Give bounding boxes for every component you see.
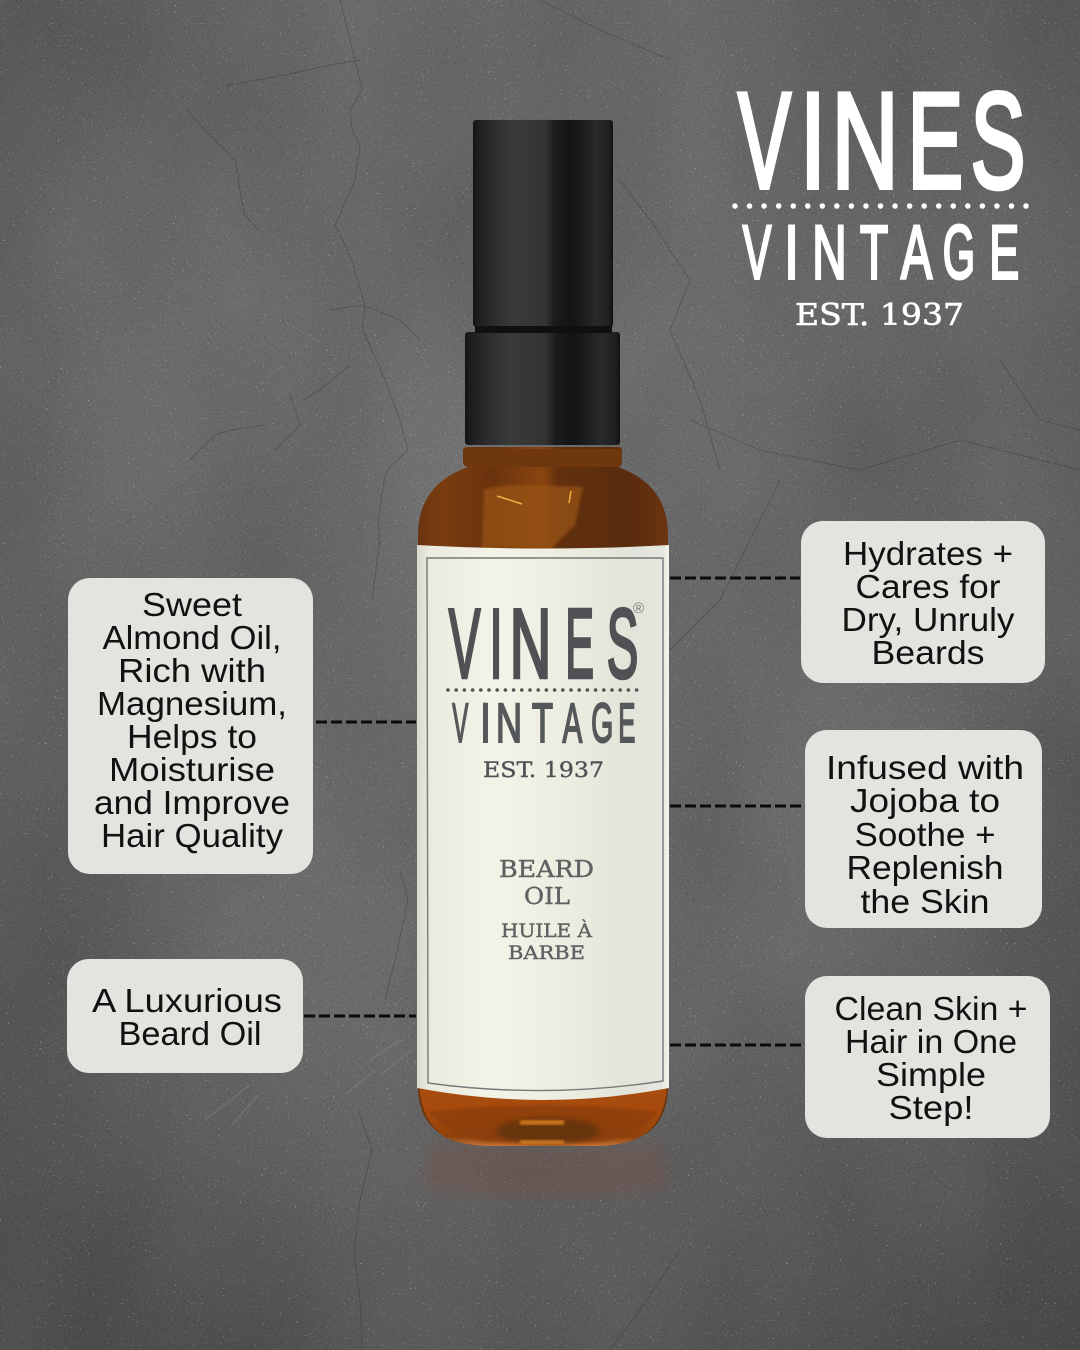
logo wordmark: VINES: S (971, 64, 1025, 217)
callout: hydrates and cares: Cares for (856, 568, 1000, 605)
label wordmark: VINTAGE: V (452, 693, 469, 755)
logo wordmark: VINTAGE: N (812, 211, 847, 295)
callout: sweet almond oil: Sweet (142, 586, 242, 623)
logo wordmark: VINES: I (800, 65, 826, 217)
label wordmark: VINES: S (607, 590, 638, 699)
callout: hydrates and cares: Beards (872, 634, 984, 671)
bottle base oil (419, 1086, 667, 1146)
callout: infused with jojoba: Soothe + (854, 816, 996, 853)
callout: sweet almond oil: Helps to (127, 718, 257, 755)
logo wordmark: VINES: V (738, 64, 791, 217)
glass highlight (482, 485, 583, 548)
logo wordmark: VINTAGE: A (901, 211, 932, 295)
bottle reflection (424, 1142, 668, 1196)
logo: Vines Vintage (735, 64, 1030, 333)
connector lines (304, 578, 805, 1045)
glass neck ring (463, 449, 622, 467)
callout: sweet almond oil (68, 578, 313, 874)
callout: clean skin and hair: Step! (888, 1089, 974, 1126)
callout: infused with jojoba (805, 730, 1042, 928)
logo: established year: EST. 1937 (795, 298, 964, 333)
label wordmark: VINTAGE: G (591, 693, 613, 755)
label wordmark: VINTAGE: A (562, 692, 582, 754)
bottle (417, 120, 669, 1196)
logo wordmark: VINTAGE (743, 210, 1019, 296)
callout: sweet almond oil: Rich with (118, 652, 266, 689)
registered mark: ® (633, 600, 644, 617)
logo wordmark: VINTAGE: I (784, 210, 799, 295)
label wordmark: VINES: V (449, 590, 480, 699)
callout: sweet almond oil: Almond Oil, (102, 619, 282, 656)
callout: hydrates and cares: Hydrates + (843, 535, 1013, 572)
label product name (499, 857, 594, 964)
amber glass body (418, 447, 668, 1146)
logo wordmark: VINTAGE: G (943, 210, 975, 295)
callout: infused with jojoba: Replenish (846, 849, 1004, 886)
logo dotted divider (735, 203, 1030, 209)
callout: infused with jojoba: Infused with (826, 749, 1024, 786)
label wordmark: VINTAGE (452, 692, 635, 755)
label product name: OIL (524, 884, 570, 910)
logo wordmark: VINES (738, 64, 1025, 217)
callout: sweet almond oil: and Improve (94, 784, 290, 821)
logo wordmark: VINES: E (908, 64, 963, 216)
callout: luxurious beard oil: Beard Oil (118, 1015, 262, 1052)
spray collar (465, 332, 620, 445)
callout: sweet almond oil: Hair Quality (101, 817, 284, 854)
callout: sweet almond oil: Magnesium, (97, 685, 287, 722)
logo wordmark: VINTAGE: E (989, 212, 1019, 296)
label established year: EST. 1937 (483, 758, 604, 782)
label wordmark: VINES: I (490, 590, 503, 699)
callout: hydrates and cares (801, 521, 1045, 683)
callout: clean skin and hair: Simple (876, 1056, 986, 1093)
logo wordmark: VINTAGE: V (743, 211, 771, 296)
callout: clean skin and hair: Clean Skin + (834, 990, 1028, 1027)
callout: hydrates and cares: Dry, Unruly (842, 601, 1015, 638)
label dotted divider (448, 688, 642, 692)
label product name: HUILE À (501, 919, 592, 942)
label brand (448, 589, 644, 964)
label wordmark: VINES: E (565, 589, 594, 700)
callout: infused with jojoba: Jojoba to (850, 782, 1000, 819)
label wordmark: VINES (449, 589, 638, 700)
label product name: BARBE (508, 942, 585, 964)
label wordmark: VINTAGE: I (480, 692, 491, 755)
callout: luxurious beard oil: A Luxurious (92, 982, 282, 1019)
product label (417, 545, 669, 1100)
logo wordmark: VINES: N (832, 65, 898, 217)
callout: sweet almond oil: Moisturise (109, 751, 275, 788)
label inner border (427, 558, 663, 1091)
callout: luxurious beard oil (67, 959, 303, 1073)
label product name: BEARD (499, 857, 594, 883)
callout: clean skin and hair (805, 976, 1050, 1138)
spray cap (473, 120, 613, 327)
label wordmark: VINTAGE: N (496, 692, 522, 755)
callout: infused with jojoba: the Skin (860, 883, 990, 920)
callout: clean skin and hair: Hair in One (845, 1023, 1017, 1060)
label wordmark: VINTAGE: T (532, 692, 553, 754)
label paper (417, 545, 669, 1100)
label wordmark: VINTAGE: E (618, 693, 635, 755)
logo wordmark: VINTAGE: T (860, 211, 888, 295)
label wordmark: VINES: N (510, 590, 551, 699)
